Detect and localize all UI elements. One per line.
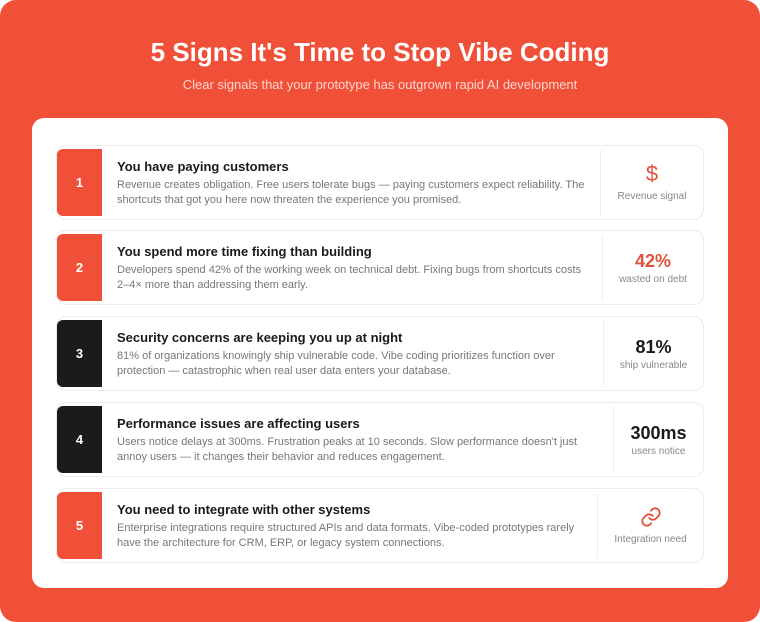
stat 81% [603, 321, 703, 386]
row 3 [56, 316, 704, 391]
row 5: 5 [76, 518, 83, 533]
stat 81%: ship vulnerable [620, 360, 687, 371]
subtitle: Clear signals that your prototype has outgrown rapid AI development [183, 77, 577, 92]
row 5: Enterprise integrations require structured APIs and data formats. Vibe-coded prototypes rarely have the architecture for CRM, ERP, or legacy system connections. [117, 522, 574, 549]
row 2: 2 [76, 260, 83, 275]
stat 42%: wasted on debt [619, 274, 687, 285]
row 4: Users notice delays at 300ms. Frustration peaks at 10 seconds. Slow performance doesn't just annoy users — it changes their behavior and reduces engagement. [117, 436, 577, 463]
row 1: 1 [76, 175, 83, 190]
row 5 [56, 488, 704, 563]
icon: dollar: Revenue signal [618, 191, 686, 202]
stat 42%: 42% [635, 251, 671, 271]
stat 300ms: users notice [632, 446, 685, 457]
row 1: You have paying customers [117, 159, 289, 174]
row 1 [56, 145, 704, 220]
card: signs list [32, 118, 728, 588]
row 3: 81% of organizations knowingly ship vulnerable code. Vibe coding prioritizes function over protection — catastrophic when real user data enters your database. [117, 350, 555, 377]
icon: dollar [600, 150, 703, 215]
row 1: Revenue creates obligation. Free users tolerate bugs — paying customers expect reliability. The shortcuts that got you here now threaten the experience you promised. [117, 179, 584, 206]
row 4 [56, 402, 704, 477]
icon: link: Integration need [614, 534, 687, 545]
row 2: You spend more time fixing than building [117, 244, 372, 259]
row 2 [56, 230, 704, 305]
icon: dollar: $ [646, 161, 658, 186]
stat 300ms: 300ms [630, 423, 687, 443]
title: 5 Signs It's Time to Stop Vibe Coding [151, 37, 609, 67]
row 4: 4 [76, 432, 83, 447]
stat 42% [602, 235, 703, 300]
row 5: You need to integrate with other systems [117, 502, 370, 517]
stat 81%: 81% [635, 337, 672, 357]
row 2: Developers spend 42% of the working week on technical debt. Fixing bugs from shortcuts costs 2–4× more than addressing them early. [117, 264, 581, 291]
icon: link [597, 493, 703, 558]
row 4: Performance issues are affecting users [117, 416, 360, 431]
row 3: 3 [76, 346, 83, 361]
stat 300ms [613, 407, 703, 472]
row 3: Security concerns are keeping you up at night [117, 330, 402, 345]
